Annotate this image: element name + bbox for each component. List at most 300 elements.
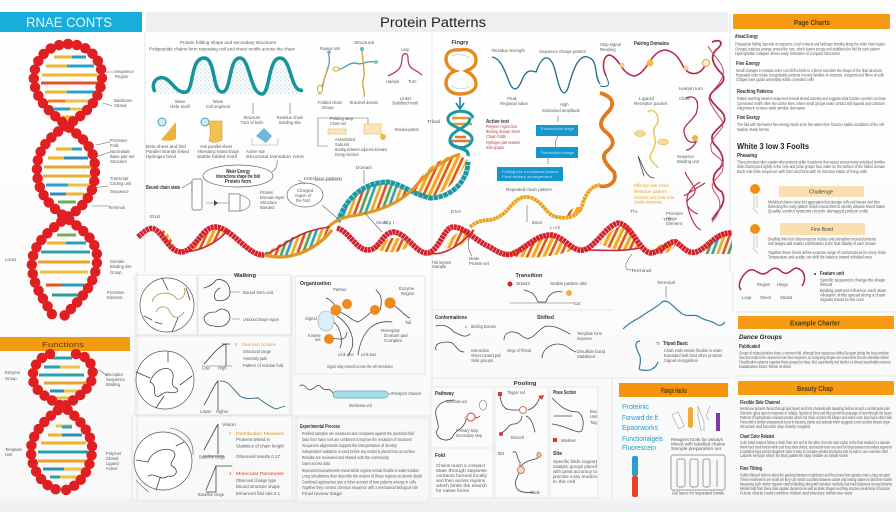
- mini red wave: Feature unit: [820, 271, 844, 277]
- icon captions: Parallel strands linked: [146, 149, 190, 154]
- helix callouts: Strand: [114, 103, 127, 108]
- yellow chain: [634, 96, 675, 204]
- text sections: Ahead Energy: [735, 34, 758, 40]
- chain diagrams: Linker: [400, 96, 412, 101]
- orange ribbon: Repeated chain pattern: [506, 187, 553, 192]
- header: function band: [0, 337, 130, 351]
- sub-panel: fold text: state through stepwise: [436, 468, 488, 473]
- branch network: Domain pair: [384, 333, 409, 338]
- branch network: Signal: [305, 316, 317, 321]
- helix callouts: Fold: [110, 143, 119, 148]
- panel: beauty chap: Flexible Side Channel: [740, 400, 780, 406]
- crimson coil: Sequence: [677, 154, 695, 159]
- title band: [146, 12, 728, 32]
- ribbon labels: Terminal: [631, 268, 651, 273]
- callouts: Template: [5, 447, 23, 452]
- text block: Data from many runs are combined to improve the resolution of structures: [302, 437, 412, 442]
- panel: example charter: Publicated: [739, 344, 760, 350]
- icon captions: Stable folded motif: [197, 154, 238, 159]
- small teal helix: Tribal: [427, 119, 440, 124]
- flow diagram: Assembled: [335, 137, 356, 142]
- ribbon labels: TTA: [630, 209, 638, 214]
- wave labels: Helix motif: [170, 104, 191, 109]
- callouts: [5, 370, 126, 471]
- notes list: Active test: [486, 119, 509, 125]
- text block: Pheasing: [737, 153, 757, 159]
- caption: Sample preparation set: [671, 446, 722, 451]
- chain panel: Template form: [577, 331, 602, 336]
- callouts: Binding: [106, 382, 121, 387]
- sub-panel: hub: Node: [530, 490, 541, 495]
- crimson coil: Hairpin turn: [679, 86, 704, 91]
- line chart one: High: [218, 366, 227, 370]
- panel: blue chain: Tripod Basic: [663, 341, 688, 347]
- panel: transitions: Sample: [432, 264, 447, 269]
- notes list: Binding domain sheet: [486, 129, 521, 134]
- callout: small oval: the fold: [296, 198, 310, 203]
- mini red wave: Binding partners influence each state: [820, 288, 887, 293]
- peak chart: [508, 281, 588, 306]
- panel: blue chain: Chain ends remain flexible in water: [664, 348, 723, 353]
- chain diagrams: Stabilised motif: [392, 100, 419, 106]
- branch network: Partner: [333, 287, 347, 292]
- crimson coil: Promoter: [666, 211, 684, 216]
- wave labels: Coil segment: [206, 104, 231, 109]
- text block: Repeated measurements reveal which regions remain flexible in water solution: [302, 468, 420, 473]
- panel: beauty chap: Labels remain short so that patterns stay visible at small sizes: [740, 453, 848, 458]
- wave labels: Structure: [244, 115, 261, 120]
- branch network: Region: [401, 291, 415, 296]
- sub-panel: pathway: Pathway: [435, 391, 454, 397]
- chart: blue wave: Sustained amplitude: [542, 108, 581, 113]
- sub-panel: fold text: which limits the search: [436, 483, 488, 488]
- sub-panel: side chain: Marker: [561, 438, 577, 443]
- header: [733, 14, 890, 29]
- wave labels: Wave: [213, 99, 224, 104]
- icon captions: Structural transition zone: [246, 154, 305, 159]
- icon captions: Alternating strand shape: [197, 149, 240, 154]
- chain diagrams: Folded chain: [318, 100, 343, 105]
- flow diagram: Energy minimum: [335, 152, 359, 157]
- chart notes: Molecular Parameter: [236, 471, 285, 476]
- chain panel: Interaction: [471, 348, 490, 353]
- mini red wave: [739, 268, 887, 302]
- panel: beauty chap: [738, 381, 894, 496]
- label: Domain: [356, 165, 373, 170]
- branch network: Signal relay network across the cell membrane: [327, 364, 393, 369]
- callouts: Sequence: [106, 377, 126, 382]
- panel: beauty chap: Future charts could combine motion and structure within one view: [740, 490, 853, 496]
- panel: fold network: Pooling: [514, 381, 536, 387]
- item: challenge: Challenge: [809, 190, 833, 196]
- sub-panel: side chain: Site: [553, 451, 562, 457]
- blue boxes flow: [497, 125, 578, 181]
- caption: [671, 437, 725, 451]
- yellow chain: Effector site chain: [634, 183, 670, 188]
- panel: blue chain: Signal recognition: [664, 358, 699, 363]
- callouts: Group: [5, 376, 17, 381]
- branch network: Link two: [361, 352, 377, 357]
- notes list: [486, 119, 521, 150]
- sub-panel: side chain: in the cell: [553, 479, 575, 484]
- blue word list: [622, 402, 663, 452]
- line chart one: Diversion Scheme: [242, 342, 277, 347]
- ribbon labels: Rpt: [384, 220, 395, 225]
- base pairs: [38, 358, 88, 477]
- yellow chain: Aromatic and polar side: [634, 195, 675, 200]
- sub-panel: side chain: promote a key reaction: [553, 474, 598, 479]
- panel: example charter: [738, 316, 894, 369]
- text block: [737, 153, 886, 174]
- item: challenge: [750, 184, 885, 214]
- helix callouts: Domain: [110, 259, 125, 264]
- line chart one: 8: [235, 342, 238, 347]
- chain panel: Stabilised: [577, 354, 596, 359]
- crimson coil: Element: [666, 221, 683, 226]
- helix callouts: Sequence: [110, 189, 130, 194]
- chart notes: Observed change type: [236, 478, 277, 483]
- sub-panel: fold text: and then across regions: [436, 478, 485, 483]
- helix callouts: Base pair set: [110, 154, 135, 159]
- helix callouts: Sequence: [115, 69, 135, 74]
- chain panel: Sequence: [577, 336, 593, 341]
- callouts: Polymer: [106, 451, 122, 456]
- ribbon labels: DNA: [451, 209, 461, 214]
- sub-panel: pathway: Primary step: [456, 428, 479, 433]
- panel: signalling: [300, 281, 422, 496]
- panel: beauty chap: Fine Tilting: [740, 466, 762, 472]
- crimson coil: Chain: [679, 96, 691, 101]
- chain diagrams: Turn: [408, 79, 417, 84]
- line chart two: [200, 381, 285, 414]
- chain diagrams: Group: [322, 105, 334, 110]
- wave labels: Binding site: [279, 120, 301, 125]
- ascending multicolour DNA: [316, 154, 468, 240]
- wavy chain top: Stop signal: [600, 42, 621, 47]
- line chart one: Structural range: [243, 349, 272, 354]
- heading: White 3 low 3 Foolts: [737, 142, 810, 151]
- panel: secondary structure: Polypeptide chains form repeating coil and sheet motifs across the chain: [149, 46, 296, 52]
- circle diagram one: [140, 278, 194, 332]
- backbone: [138, 227, 264, 255]
- panel: beauty chap: Structure and function stay closely coupled: [740, 424, 811, 429]
- branch network: Complex: [384, 338, 403, 343]
- header: function band: Functions: [42, 342, 85, 349]
- line chart two: Higher: [216, 409, 229, 414]
- helix callouts: Promoter: [107, 290, 125, 295]
- small teal helix: [427, 111, 473, 156]
- panel: circle diagrams: [134, 273, 285, 497]
- wave labels: [170, 99, 304, 125]
- chain panel: Disulfide bond: [577, 349, 606, 354]
- panel: example charter: Databases store these entries: [739, 364, 791, 369]
- panel: blue chain: Tt: [656, 341, 661, 346]
- chain panel: [435, 315, 606, 363]
- text block: Results are reviewed and shared with the community: [302, 455, 390, 460]
- notes list: Polymer region link: [486, 124, 518, 129]
- sub-panel: side chain: Box: [590, 409, 598, 414]
- text block: Together they connect chemical sequence with a mechanical biological role: [302, 485, 419, 490]
- panel: transitions: [432, 256, 606, 363]
- yellow chain: Stable segments: [634, 200, 662, 204]
- helix callouts: Element: [107, 295, 123, 300]
- icon captions: Active site: [246, 149, 266, 154]
- callouts: Receptor: [106, 372, 124, 377]
- branch network: Tail: [405, 320, 411, 325]
- chart notes: Baseline range: [199, 454, 226, 460]
- text block: Each rule links sequence with form and form with its function inside of living cells: [737, 169, 867, 174]
- chain panel: Binding Domain: [471, 324, 497, 329]
- caption: Mixed with labelled chains: [671, 442, 725, 446]
- text block: Independent validation is used before any model is placed into an archive: [302, 449, 416, 454]
- panel: transitions: Fold segment: [432, 260, 452, 265]
- chain diagrams: Structural: [354, 40, 374, 45]
- chart notes: 4: [229, 471, 232, 476]
- stippled wave: [153, 58, 303, 94]
- panel: transitions: Transition: [516, 273, 542, 279]
- sub-panel: fold text: [431, 448, 493, 498]
- circle diagram two: [136, 351, 194, 409]
- sub-panel: fold text: contacts formed locally: [436, 473, 488, 478]
- helix callouts: Binding site: [110, 264, 132, 269]
- sub-panel: fold text: Chains reach a compact: [436, 463, 486, 468]
- panel: flange hacks: Flange Hacks: [661, 388, 687, 395]
- branch network: Receptor: [381, 328, 401, 333]
- crimson coil: Hinge: [666, 216, 678, 221]
- blue word list: Forward de ft: [622, 413, 659, 422]
- chain panel: Sheet contact pair: [471, 353, 502, 358]
- item: fine bond: Temperature and acidity can shift the balance toward unfolded ones: [768, 254, 872, 260]
- diagram: cylinders: Bound chain state: [146, 185, 180, 191]
- panel: blue chain: [623, 280, 724, 371]
- blue word list: Functionalgels: [622, 434, 663, 443]
- small cell sketches: Bound form unit: [243, 290, 274, 295]
- capsule: [300, 385, 421, 408]
- chain diagrams: Branched domain: [350, 100, 379, 105]
- helix callouts: [5, 69, 135, 300]
- line chart two: Lower: [200, 409, 212, 414]
- panel: flange hacks: [619, 383, 728, 497]
- icon captions: Beta sheet and fold: [146, 144, 187, 149]
- blue word list: Proteinic: [622, 402, 649, 411]
- panel: protein chains: [298, 40, 422, 225]
- callout: small oval: [287, 176, 343, 218]
- mini red wave: Allosteric shifts spread along a chain: [820, 292, 886, 298]
- chain diagrams: Repeat unit: [320, 46, 341, 51]
- chain panel: Side groups: [471, 358, 493, 363]
- blue boxes flow: Folding into a functional protein: [502, 170, 558, 174]
- icons: tools: [672, 406, 720, 431]
- sub-panel: side chain: [550, 387, 598, 498]
- line chart one: Assembly path: [243, 356, 268, 361]
- panel: secondary structure: [146, 40, 343, 218]
- branch network: Kinase: [308, 333, 321, 338]
- chart notes: 2: [229, 431, 232, 436]
- icon captions: Anti parallel sheet: [200, 144, 233, 149]
- branch network: Link one: [338, 352, 355, 357]
- notes list: Hydrogen pair network: [486, 140, 521, 145]
- sub-panel: side chain: Unit: [590, 414, 598, 419]
- branch network: set: [315, 337, 321, 342]
- callouts: Active: [106, 466, 118, 471]
- callout: oval: Water Energy: [226, 169, 250, 175]
- sub-panel: side chain: Specific folds support: [553, 459, 598, 464]
- label: [298, 165, 389, 225]
- wavy chain top: Reading: [600, 47, 616, 52]
- chart: blue wave: Sequence charge pattern: [539, 49, 587, 54]
- callout: oval: Protein form: [225, 179, 251, 185]
- crimson coil: Binding unit: [677, 159, 700, 164]
- text sections: Hydrophobic collapse drives early formation of compact structures: [735, 51, 840, 56]
- small cell sketches: Unbound shape region: [243, 317, 280, 322]
- icon: figure eight fold: Fingry: [452, 40, 469, 46]
- header: RNA cones: RNAE CONTS: [26, 14, 112, 30]
- text block: [300, 424, 422, 496]
- panel: example charter: Dance Groups: [739, 334, 782, 341]
- chart notes: Proteins tested in: [236, 437, 271, 442]
- helix callouts: Region: [115, 74, 129, 79]
- callout: oval: Interactions shape the fold: [216, 174, 260, 180]
- helix callouts: Structure: [110, 159, 128, 164]
- sub-panel: hub: Bit: [498, 451, 505, 456]
- capsule: Transport channel: [391, 391, 421, 396]
- item: challenge: Quality control systems recycle damaged protein units: [768, 208, 868, 214]
- diagram: cylinders: Protein: [260, 190, 274, 195]
- wave labels: Turn of helix: [241, 120, 264, 125]
- flow diagram: Binding between adjacent domains: [335, 147, 387, 152]
- chart notes: Observed results 0.17: [236, 454, 281, 459]
- text block: Open access data: [302, 461, 331, 466]
- mini red wave: Signals travel to the core: [820, 297, 865, 302]
- vertical red helix: [708, 41, 725, 222]
- chart notes: Bound structure shape: [236, 484, 281, 489]
- sub-panel: fold text: Fold: [435, 453, 445, 459]
- gel box: Gel lanes for separated bands: [672, 490, 724, 496]
- flow diagram: Residue pattern: [395, 127, 420, 132]
- chart notes: Baseline range: [198, 492, 225, 497]
- text sections: Fine Energy: [737, 115, 760, 121]
- ribbon labels: [150, 205, 671, 273]
- chain diagrams: [318, 40, 422, 110]
- panel: beauty chap: Chart Color Related: [740, 434, 774, 440]
- blue word list: Epaorworks: [622, 423, 658, 432]
- helix callouts: Coding unit: [110, 181, 132, 186]
- panel: fold network: [431, 381, 598, 498]
- text sections: Fine Energy: [736, 61, 760, 67]
- text sections: Alignment scores rank similar domains: [737, 106, 805, 110]
- text block: Purified samples are measured and compared against the predicted fold: [302, 431, 415, 436]
- helix callouts: Locus: [5, 257, 16, 262]
- sub-panel: hub: [495, 387, 548, 498]
- callout: small oval: Charged: [297, 188, 314, 193]
- title band: Protein Patterns: [380, 15, 486, 30]
- rung lenses: [160, 225, 732, 257]
- yellow chain: Ligand: [639, 96, 655, 101]
- capsule: Membrane unit: [349, 403, 373, 408]
- chart notes: Vision: [222, 422, 237, 427]
- label: Strand: [376, 220, 389, 225]
- chart: blue wave: Residue strength: [492, 48, 526, 53]
- text sections: Chaperones guide assembly within crowded cells: [736, 77, 814, 82]
- item: fine bond: [750, 223, 887, 260]
- diagram: cylinders: [146, 179, 285, 211]
- sub-panel: hub: Trigger set: [507, 390, 526, 395]
- branch network: [305, 286, 415, 369]
- panel: beauty chap: Beauty Chap: [797, 386, 833, 393]
- flow diagram: Chain set: [330, 121, 347, 126]
- callout: small oval: region of: [295, 193, 312, 198]
- helix callouts: Backbone: [114, 98, 133, 103]
- sub-panel: side chain: catalytic groups placed: [553, 464, 598, 469]
- line chart one: [202, 342, 284, 370]
- panel: example charter: Example Charter: [790, 320, 840, 328]
- circle diagram three: [134, 428, 193, 492]
- branch network: Enzyme: [399, 286, 415, 291]
- blue boxes flow: Translation stage: [540, 151, 574, 155]
- callouts: Strand: [106, 456, 119, 461]
- arrow down: [456, 97, 464, 109]
- sub-panel: pathway: Secondary step: [456, 433, 483, 438]
- panel: transitions: Mode: [469, 256, 480, 261]
- right panel: chart notes: [733, 14, 890, 302]
- notes list: Side groups: [486, 145, 504, 150]
- mini red wave: Region: [757, 282, 771, 287]
- text sections: Reaching Patterns: [737, 89, 773, 95]
- callout: oval: [203, 160, 277, 187]
- icon captions: [146, 144, 305, 159]
- main red DNA ribbon: [138, 205, 732, 273]
- large DNA helix: [5, 44, 135, 322]
- chart: blue wave: Peak: [507, 96, 518, 101]
- small cell sketches: [204, 280, 280, 327]
- text block: Final review stage: [302, 491, 343, 496]
- sub-panel: side chain: Tag: [590, 420, 597, 425]
- mini red wave: Specific sequences change the shape: [820, 278, 886, 282]
- chart notes: Distribution Measure: [236, 431, 285, 436]
- helix backbone: [32, 44, 102, 322]
- flow diagram: Folding step: [330, 116, 354, 121]
- peak chart: Stable pattern site: [550, 281, 588, 286]
- mini red wave: Hinge: [777, 282, 789, 287]
- sub-panel: side chain: Phase Section: [553, 390, 576, 396]
- orange ribbon: [470, 93, 615, 227]
- panel: signalling: Organization: [300, 281, 331, 287]
- ribbon labels: Link: [550, 225, 561, 230]
- diagram: cylinders: Domain layer: [260, 195, 285, 200]
- mini red wave: Result: [820, 282, 833, 287]
- line chart one: Low: [202, 366, 211, 370]
- chain diagrams: Hairpin: [386, 79, 400, 84]
- blue boxes flow: Final tertiary arrangement: [502, 175, 553, 179]
- wavy chain top: Pairing Domains: [634, 41, 669, 47]
- blue boxes flow: Transcription stage: [540, 127, 574, 131]
- wave labels: Residue chain: [277, 115, 304, 120]
- text sections: [735, 34, 886, 132]
- mini red wave: Strand: [780, 295, 793, 300]
- sub-panel: pathway: Substrate unit: [446, 399, 468, 404]
- text block: Long simulations then describe the motion of these regions at atomic detail: [302, 474, 422, 478]
- chart notes: Enhanced fold rate 2.1: [236, 491, 281, 496]
- header: RNA cones: [0, 12, 142, 32]
- icons: sheets: [158, 118, 278, 145]
- panel: red and yellow chains: [600, 41, 725, 230]
- helix callouts: Group: [110, 270, 122, 275]
- callouts: Ligand: [106, 461, 119, 466]
- wave labels: Wave: [175, 99, 186, 104]
- header: Page Charts: [794, 20, 830, 27]
- flow diagram: Subunit: [335, 142, 350, 147]
- helix base pairs: [38, 57, 99, 295]
